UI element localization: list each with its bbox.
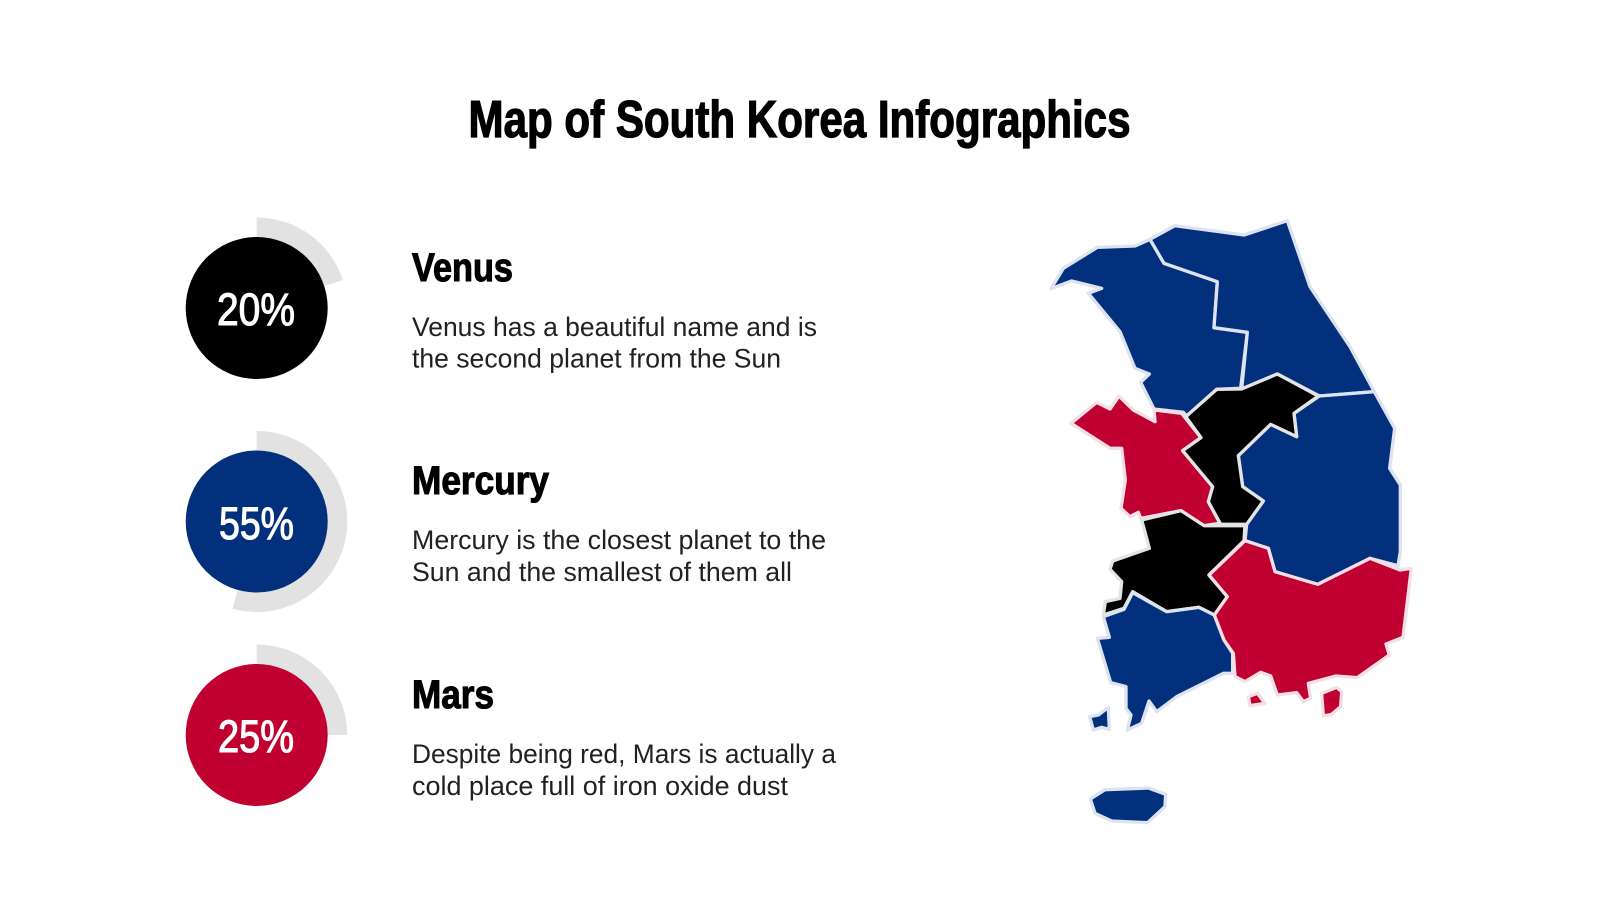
heading: Mercury: Mercury — [412, 459, 550, 503]
panel: Mercury — [186, 431, 833, 612]
panel: Venus — [186, 218, 824, 379]
text: Mercury description: Sun and the smallest of them all — [412, 557, 792, 587]
donut: Mercury 55% — [186, 431, 347, 612]
text: Venus description: the second planet from the Sun — [412, 344, 781, 374]
donut: Mars 25%: 25% — [218, 711, 294, 762]
donut: Venus 20%: 20% — [217, 284, 295, 335]
panel: Mars — [186, 644, 843, 806]
text: Venus description: Venus has a beautiful name and is — [412, 312, 817, 342]
text: Mars description: Despite being red, Mars is actually a — [412, 739, 836, 769]
map of South Korea — [1051, 221, 1411, 823]
heading: Mars: Mars — [412, 673, 494, 717]
text: Mercury description: Mercury is the closest planet to the — [412, 525, 826, 555]
donut: Mercury 55%: 55% — [219, 498, 294, 549]
donut: Mars 25% — [186, 644, 347, 806]
title: Map of South Korea Infographics — [468, 91, 1130, 149]
heading: Venus: Venus — [412, 246, 513, 290]
donut: Venus 20% — [186, 218, 343, 379]
text: Mars description: cold place full of iron oxide dust — [412, 771, 789, 801]
